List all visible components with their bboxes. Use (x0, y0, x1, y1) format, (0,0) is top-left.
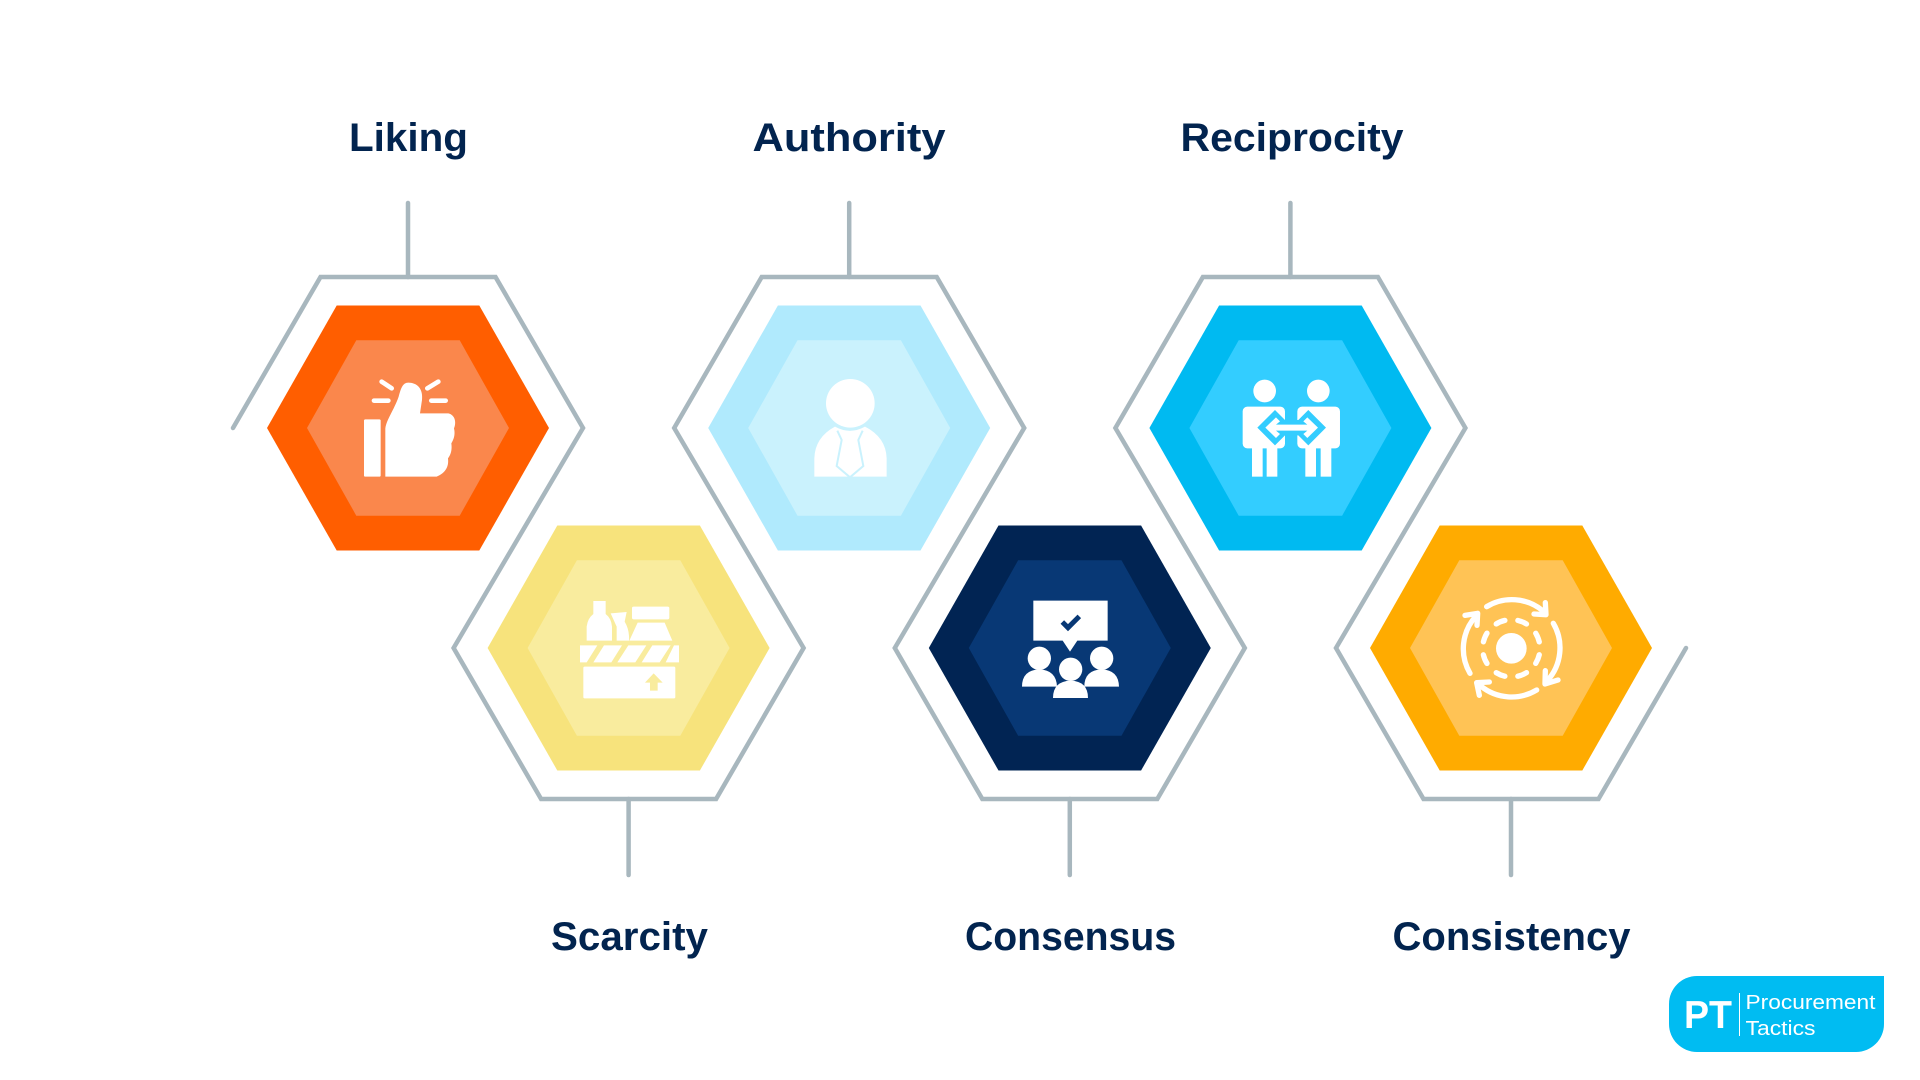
icon: circular arrows (1463, 600, 1560, 697)
label: Consensus: Consensus (965, 915, 1176, 959)
label: Liking: Liking (349, 116, 468, 160)
label: Scarcity: Scarcity (551, 915, 709, 959)
icon: box of goods (580, 601, 679, 698)
icon: thumbs up (364, 382, 455, 477)
zigzag outline connecting all hexagons (233, 277, 1686, 799)
hexagon: Consistency (1370, 526, 1652, 770)
label: Authority: Authority (752, 116, 946, 160)
icon: two people exchanging (1243, 380, 1340, 477)
label: Reciprocity: Reciprocity (1180, 116, 1404, 160)
label: Consistency: Consistency (1392, 915, 1631, 959)
connector lines from hexagons to labels (408, 203, 1511, 875)
icon: businessperson (814, 379, 887, 477)
logo: Procurement Tactics: Tactics (1746, 1018, 1816, 1040)
hexagon: Liking (267, 306, 549, 550)
logo: Procurement Tactics (1669, 976, 1884, 1052)
logo: Procurement Tactics: Procurement (1746, 992, 1876, 1014)
hexagon: Reciprocity (1149, 306, 1431, 550)
icon: group with speech bubble (1022, 601, 1119, 698)
logo: Procurement Tactics: PT (1684, 994, 1732, 1037)
hexagon: Consensus (929, 526, 1211, 770)
hexagon: Scarcity (488, 526, 770, 770)
hexagon: Authority (708, 306, 990, 550)
